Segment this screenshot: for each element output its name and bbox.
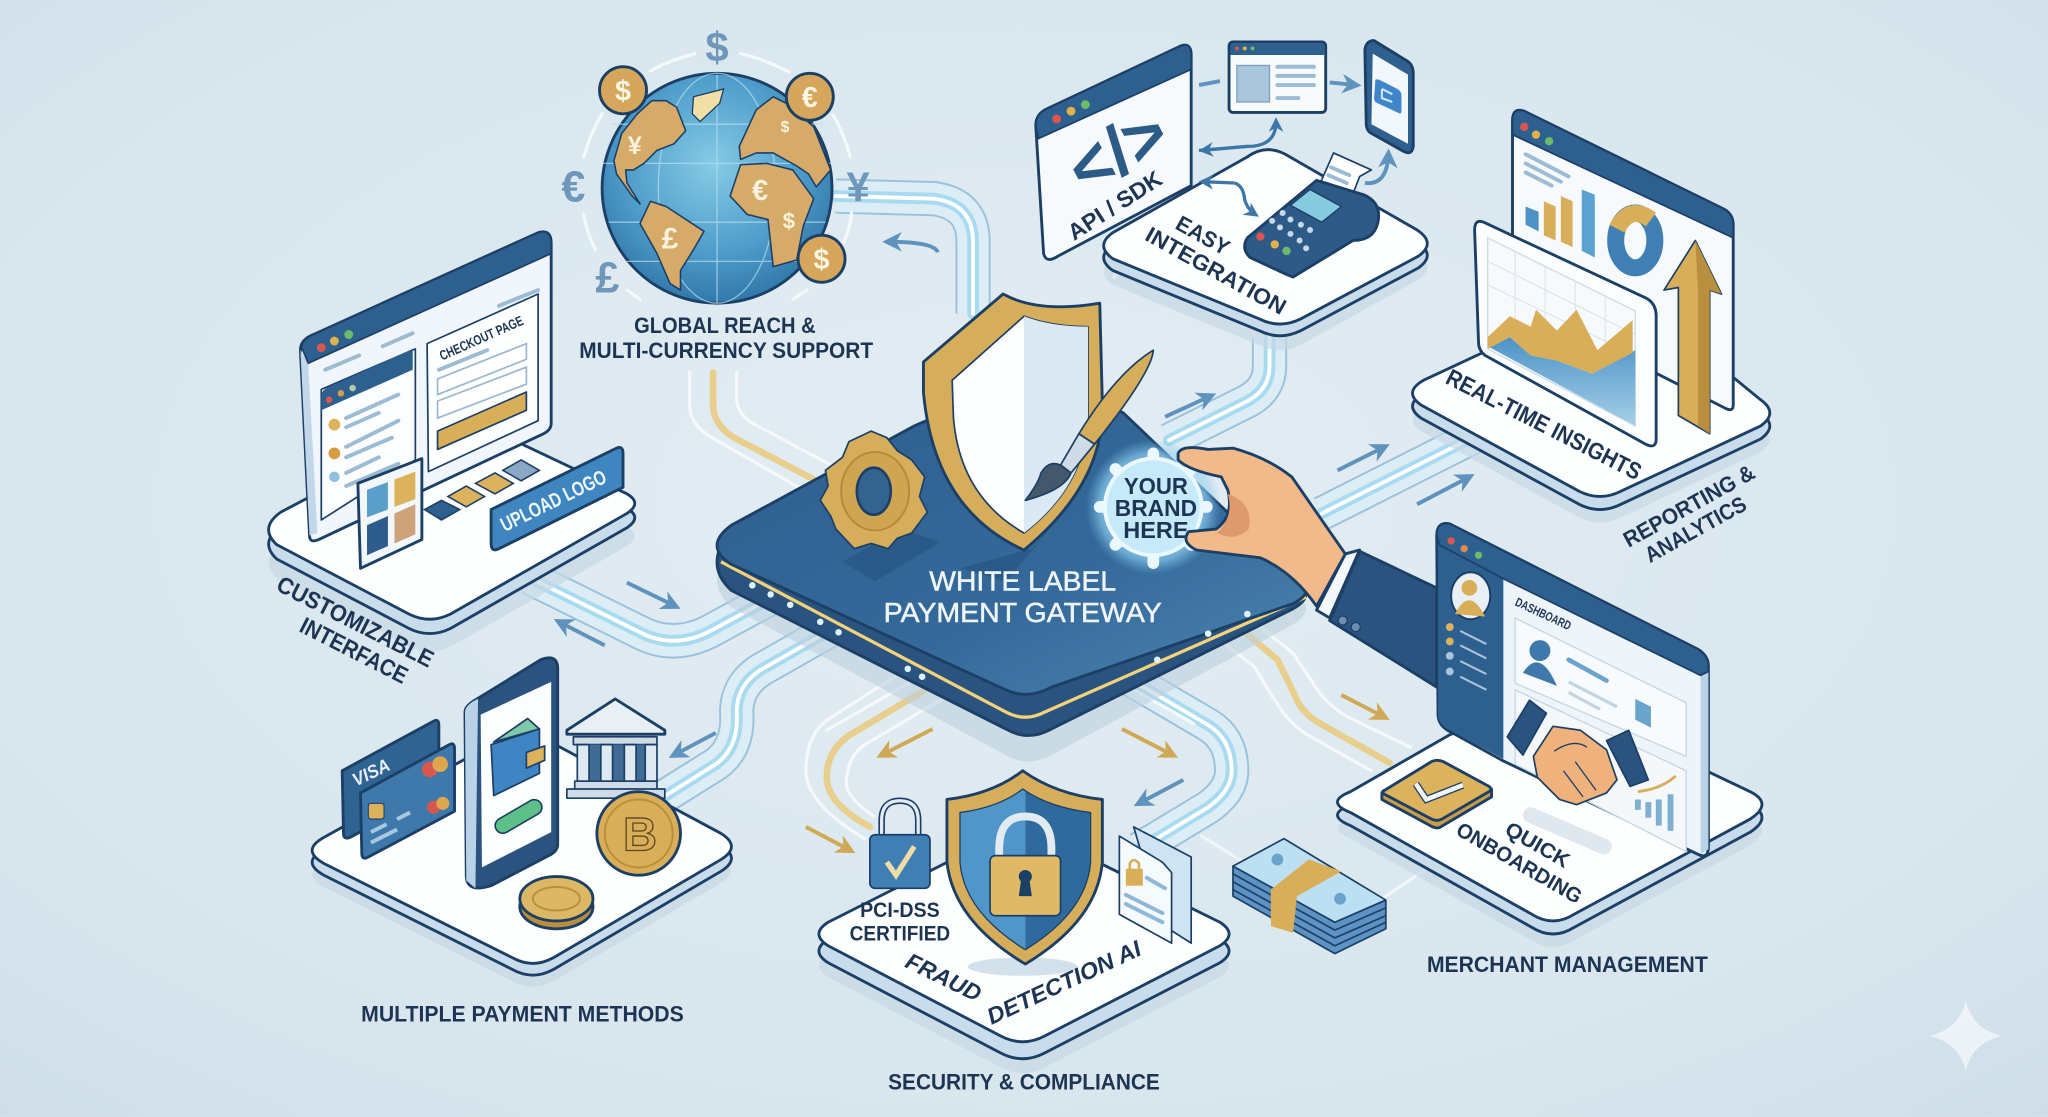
dashboard window: [1437, 523, 1708, 856]
icon: money stack: [1233, 839, 1386, 954]
icon: globe: €: [752, 175, 768, 207]
icon: floating currency symbols: ¥: [846, 163, 870, 210]
window: api sdk: [1036, 45, 1191, 259]
icon: documents: [1119, 827, 1191, 943]
icon: cards: [342, 720, 455, 858]
icon: floating currency symbols: [561, 24, 870, 303]
panel: global reach: [561, 24, 874, 363]
platform: [312, 734, 731, 987]
platform: [269, 420, 635, 652]
small window: [1229, 42, 1326, 112]
icon: pos terminal: [1245, 153, 1379, 277]
icon: paint brush: [1025, 350, 1153, 500]
icon: handshake: [1507, 700, 1648, 805]
label: easy integration: INTEGRATION: [1141, 222, 1290, 320]
label: security and compliance: SECURITY & COMPLIANCE: [888, 1069, 1160, 1094]
window: api sdk: API / SDK: [1063, 165, 1167, 245]
icon: sparkle watermark: [1929, 1001, 2002, 1071]
icon: padlock with check: [870, 801, 930, 888]
platform: [1104, 150, 1427, 350]
placeholder pill: [1531, 815, 1604, 846]
colour swatches: [424, 460, 539, 520]
icon: phone wallet: [465, 658, 558, 888]
title: white label payment gateway: WHITE LABEL: [929, 565, 1116, 596]
icon: coins: $: [615, 76, 631, 108]
badge: your brand here: YOUR: [1124, 473, 1188, 499]
small connector arrows: [1199, 81, 1388, 214]
label: multiple payment methods: MULTIPLE PAYMENT METHODS: [361, 1002, 684, 1027]
panel: easy integration: [1036, 41, 1427, 350]
label: customizable interface: CUSTOMIZABLE: [273, 571, 438, 672]
label: pci-dss certified: PCI-DSS: [860, 899, 940, 922]
bar chart: [1526, 190, 1595, 257]
icon: globe: [602, 73, 832, 303]
icon: cards: VISA: [349, 754, 393, 790]
label: quick onboarding: ONBOARDING: [1452, 818, 1586, 909]
icon: globe: £: [662, 222, 679, 255]
icon: bitcoin coin: [597, 792, 680, 875]
window: api sdk: </>: [1054, 92, 1181, 210]
label: merchant management: MERCHANT MANAGEMENT: [1427, 952, 1708, 977]
sub-window: [321, 349, 415, 520]
icon: floating currency symbols: £: [595, 255, 619, 303]
icon: coins: €: [802, 82, 818, 114]
donut chart: [1616, 213, 1655, 268]
label: fraud detection ai: FRAUD: [902, 948, 986, 1007]
panel: customizable interface: [269, 232, 635, 689]
icon: floating currency symbols: $: [705, 24, 729, 71]
icon: small coin: [520, 877, 593, 929]
panel: merchant management: [1337, 523, 1762, 977]
title: white label payment gateway: [884, 565, 1162, 628]
up arrow: [1664, 240, 1721, 434]
shadow: [968, 958, 1078, 976]
icon: coins: $: [814, 244, 830, 276]
icon: globe: ¥: [628, 133, 642, 160]
platform: [1337, 692, 1762, 947]
flow lines: connectors between hub and modules: [529, 196, 1480, 901]
platform: [717, 392, 1306, 762]
platform: [1413, 294, 1770, 523]
dashboard window: DASHBOARD: [1513, 595, 1573, 633]
label: easy integration: EASY: [1172, 211, 1234, 260]
browser window: checkout: [300, 232, 551, 541]
label: fraud detection ai: [902, 935, 1146, 1029]
platform: [819, 830, 1229, 1073]
icon: bitcoin coin: B: [623, 807, 657, 860]
checkout card: [427, 294, 538, 472]
flow arrows: [559, 242, 1469, 850]
phone: [1365, 41, 1413, 153]
line chart panel: [1475, 221, 1656, 446]
palette card: [358, 459, 422, 568]
label: fraud detection ai: DETECTION AI: [983, 935, 1146, 1029]
icon: gold check badge: [1382, 760, 1492, 828]
heading: global reach: MULTI-CURRENCY SUPPORT: [579, 338, 874, 363]
back window: [1512, 110, 1733, 410]
title: white label payment gateway: PAYMENT GATEWAY: [884, 597, 1162, 628]
panel: multiple payment methods: [312, 658, 731, 1027]
heading: global reach: GLOBAL REACH &: [634, 313, 816, 338]
label: pci-dss certified: [850, 899, 950, 946]
panel: security and compliance: [819, 771, 1229, 1094]
label: pci-dss certified: CERTIFIED: [850, 923, 950, 946]
label: real-time insights: REAL-TIME INSIGHTS: [1442, 364, 1646, 485]
panel: reporting and analytics: [1413, 110, 1770, 568]
panel: central hub white label gateway: [717, 294, 1437, 762]
icon: currency orbit arcs: [584, 54, 852, 299]
label: customizable interface: INTERFACE: [296, 612, 412, 689]
icon: bank: [567, 699, 665, 798]
icon: floating currency symbols: €: [561, 163, 585, 211]
icon: globe: $: [781, 119, 790, 136]
label: reporting analytics: REPORTING &: [1619, 460, 1759, 552]
avatar: [1451, 572, 1490, 619]
icon: gear: [820, 431, 927, 549]
icon: hand and sleeve: [1178, 448, 1437, 687]
badge: your brand here: HERE: [1123, 517, 1189, 543]
button: upload logo: UPLOAD LOGO: [497, 466, 610, 537]
icon: globe: $: [783, 209, 796, 234]
shadow: [842, 529, 1045, 581]
label: quick onboarding: QUICK: [1501, 818, 1574, 873]
label: reporting analytics: ANALYTICS: [1640, 491, 1751, 568]
heading: global reach: [579, 313, 874, 363]
badge: your brand here: BRAND: [1115, 495, 1197, 521]
profile card: [1515, 618, 1686, 852]
icon: shield with lock: [947, 771, 1102, 964]
badge: your brand here: [1085, 439, 1221, 575]
icon: coins: [600, 67, 845, 282]
icon: shield: [923, 294, 1102, 550]
checkout card: CHECKOUT PAGE: [437, 313, 526, 363]
